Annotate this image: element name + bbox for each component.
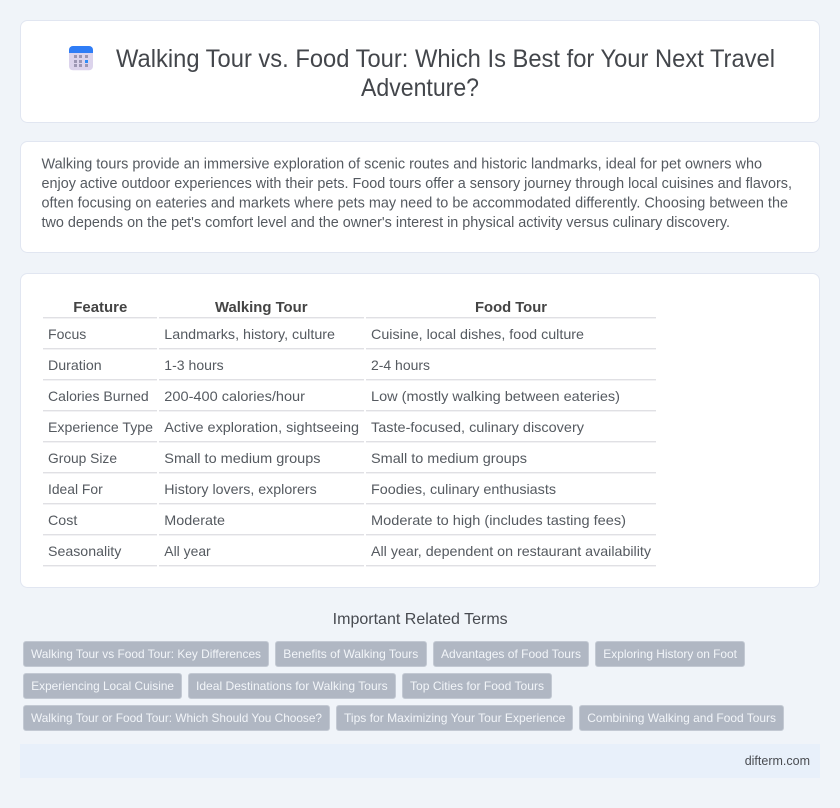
tag (24, 674, 182, 698)
table row: duration: 1-3 hours (164, 357, 224, 373)
title: Adventure? (361, 74, 479, 102)
table row: seasonality: All year, dependent on restaurant availability (371, 543, 651, 559)
table row: focus: Landmarks, history, culture (164, 326, 335, 342)
table row: focus: Focus (48, 326, 86, 342)
tag (188, 674, 396, 698)
table row: experience type: Taste-focused, culinary discovery (371, 419, 584, 435)
table row: group size (48, 450, 527, 466)
table row: duration: Duration (48, 357, 102, 373)
text block: introduction: Walking tours provide an immersive exploration of scenic routes and historic landmarks, ideal for pet owners who (42, 156, 762, 172)
table header row: Feature (73, 299, 127, 316)
tag (402, 674, 552, 698)
tag (24, 706, 330, 730)
table row: duration: 2-4 hours (371, 357, 430, 373)
tag: Advantages of Food Tours (441, 647, 581, 661)
table row: experience type: Experience Type (48, 419, 153, 435)
icon: calendar (69, 46, 93, 70)
table row: focus (48, 326, 584, 342)
text block: introduction: often focusing on eateries and markets where pets may need to be accommodated differently. Choosing between the (42, 195, 788, 211)
table row: experience type: Active exploration, sightseeing (164, 419, 359, 435)
text block: introduction (42, 156, 792, 231)
table row: calories burned: Low (mostly walking between eateries) (371, 388, 620, 404)
title: Walking Tour vs. Food Tour: Which Is Best for Your Next Travel (116, 45, 775, 73)
footer source: difterm.com (745, 753, 810, 768)
tag: Walking Tour vs Food Tour: Key Differences (31, 647, 261, 661)
tag: Top Cities for Food Tours (410, 679, 544, 693)
tag: Tips for Maximizing Your Tour Experience (344, 711, 566, 725)
table row: seasonality: All year (164, 543, 211, 559)
panel: title card (20, 20, 820, 122)
table header row (73, 299, 547, 316)
table row: cost: Moderate (164, 512, 225, 528)
table row: ideal for: Foodies, culinary enthusiasts (371, 481, 556, 497)
text block: introduction: enjoy active outdoor experiences with their pets. Food tours offer a sensory journey through local cuisines and flavors, (42, 176, 792, 192)
heading: important related terms: Important Related Terms (333, 611, 508, 628)
tag (596, 642, 744, 666)
table row: duration (48, 357, 430, 373)
table row: calories burned: Calories Burned (48, 388, 149, 404)
table row: group size: Small to medium groups (371, 450, 527, 466)
table header row: Food Tour (475, 299, 547, 316)
related term tags (24, 642, 784, 730)
table row: focus: Cuisine, local dishes, food culture (371, 326, 584, 342)
panel: introduction (20, 142, 820, 252)
tag (24, 642, 268, 666)
text block: introduction: two depends on the pet's comfort level and the owner's interest in physical activity versus culinary discovery. (42, 215, 730, 231)
tag (434, 642, 588, 666)
table row: cost (48, 512, 626, 528)
tag: Walking Tour or Food Tour: Which Should You Choose? (31, 711, 322, 725)
table row: group size: Small to medium groups (164, 450, 320, 466)
table row: calories burned (48, 388, 620, 404)
tag (336, 706, 572, 730)
table row: seasonality: Seasonality (48, 543, 121, 559)
table row: ideal for (48, 481, 556, 497)
table row: group size: Group Size (48, 450, 117, 466)
tag: Benefits of Walking Tours (283, 647, 418, 661)
tag: Exploring History on Foot (603, 647, 738, 661)
table row: cost: Cost (48, 512, 77, 528)
tag (276, 642, 426, 666)
footer bar (20, 744, 820, 778)
tag: Experiencing Local Cuisine (31, 679, 174, 693)
tag: Combining Walking and Food Tours (587, 711, 776, 725)
title (116, 45, 775, 102)
tag: Ideal Destinations for Walking Tours (196, 679, 388, 693)
table header row: Walking Tour (215, 299, 308, 316)
table row: calories burned: 200-400 calories/hour (164, 388, 305, 404)
table row: experience type (48, 419, 584, 435)
table row: cost: Moderate to high (includes tasting fees) (371, 512, 626, 528)
table row: ideal for: Ideal For (48, 481, 103, 497)
panel: comparison table (20, 274, 820, 588)
tag (580, 706, 784, 730)
table row: ideal for: History lovers, explorers (164, 481, 317, 497)
table row: seasonality (48, 543, 651, 559)
